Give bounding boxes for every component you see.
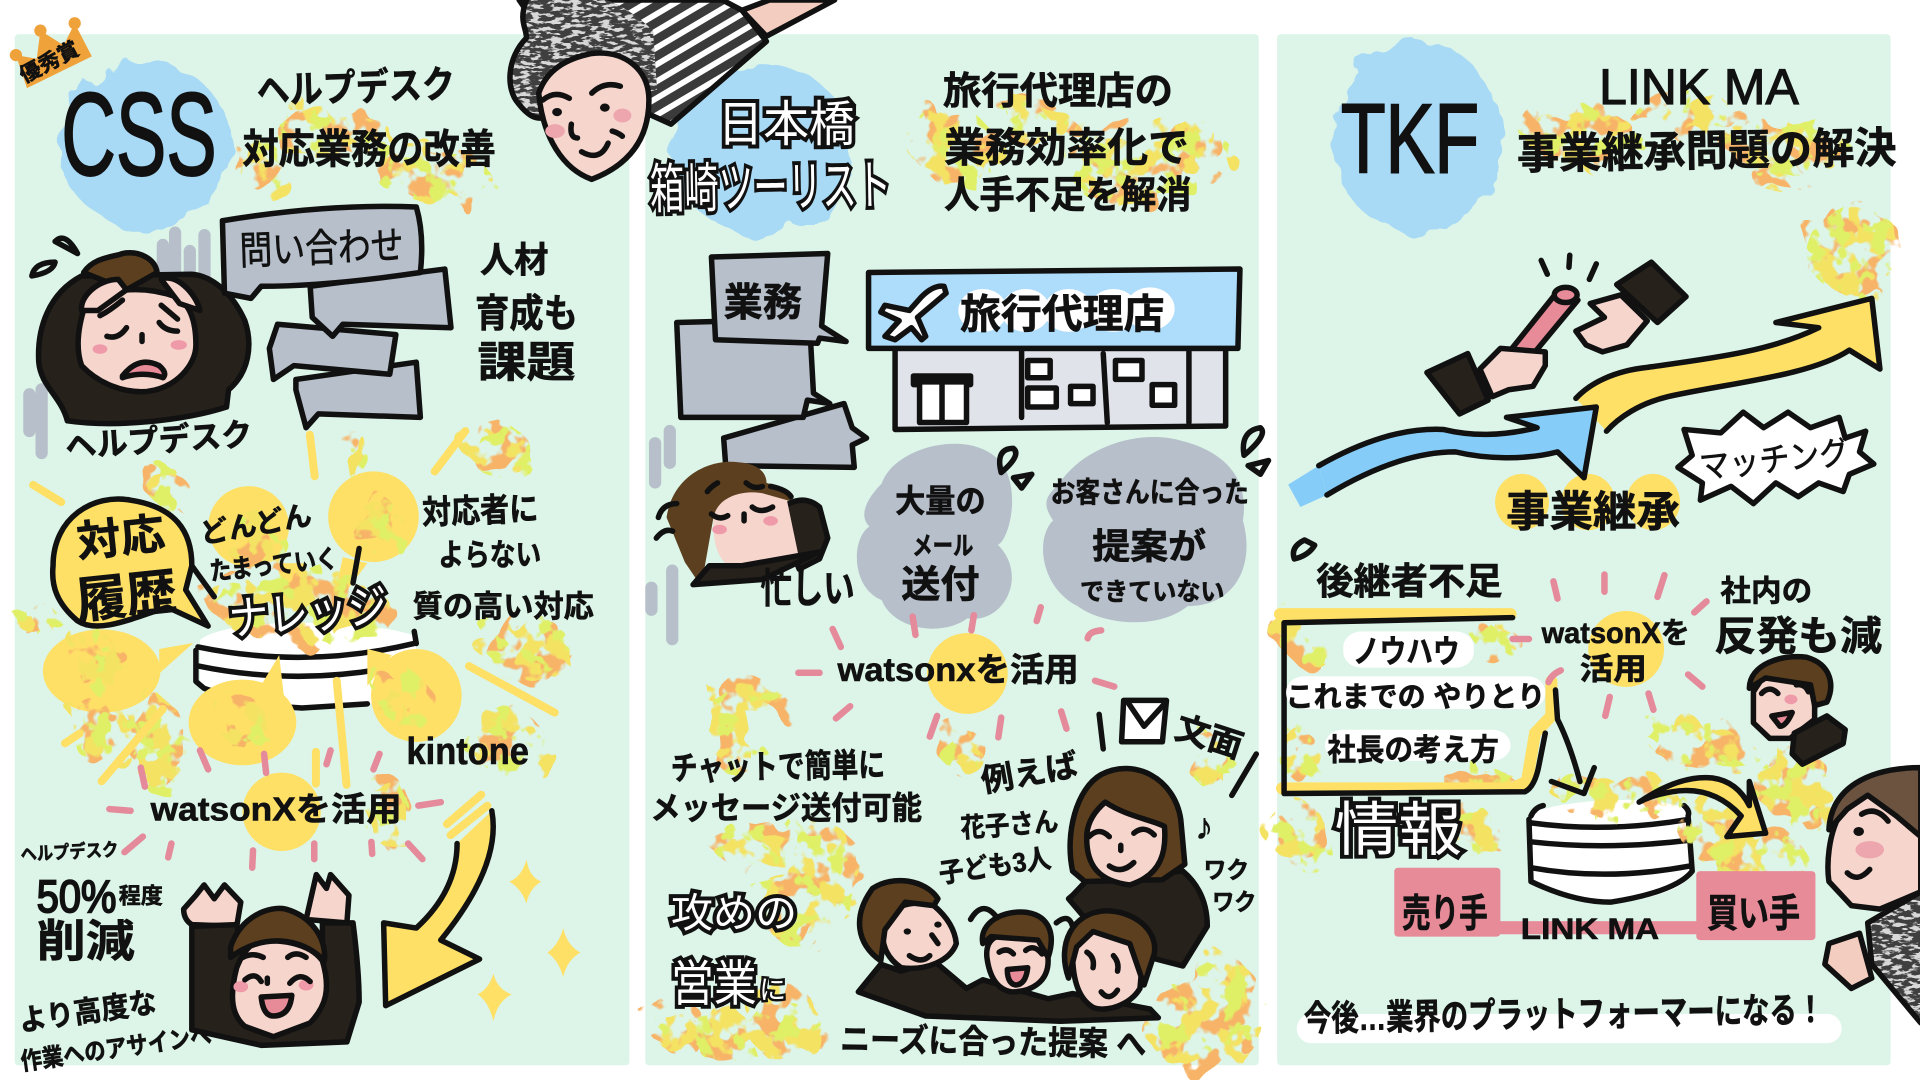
pink rays, panel 2 xyxy=(798,607,1114,737)
gray vibration lines, panel 1 xyxy=(29,233,204,453)
cloud text: bulk mail: 大量の xyxy=(895,483,986,519)
text: training is also an issue: 育成も xyxy=(475,293,578,336)
white highlight under closing line xyxy=(1297,1014,1842,1043)
text: excited: ワク xyxy=(1204,857,1249,883)
text: for example: 例えば xyxy=(978,747,1081,799)
cloud: bulk mail xyxy=(857,444,1012,629)
icon: music note: ♪ xyxy=(1195,806,1213,847)
text: high-quality response: よらない xyxy=(438,539,541,573)
text: chat messaging: チャットで簡単に xyxy=(671,747,885,788)
text: less internal pushback: 反発も減 xyxy=(1714,613,1882,659)
database: LINK MA xyxy=(1529,800,1692,902)
text: use watsonX xyxy=(1541,617,1690,687)
box text: これまでの やりとり xyxy=(1286,682,1545,713)
panel: CSS xyxy=(15,34,629,1065)
title: agency efficiency: 人手不足を解消 xyxy=(944,175,1191,217)
text: excited: ワク xyxy=(1212,889,1256,915)
text: steadily accumulates xyxy=(198,499,339,586)
award badge xyxy=(10,17,92,88)
cloud text: bulk mail: メール xyxy=(912,533,973,561)
text: for example: 花子さん xyxy=(960,807,1059,844)
cloud text: bulk mail xyxy=(895,483,986,607)
panel: Nihonbashi Hakozaki Tourist xyxy=(645,34,1259,1065)
bubble label: 問い合わせ xyxy=(239,225,404,273)
seller, buyer and link labels: LINK MA xyxy=(1521,913,1659,946)
cloud text: proposals: できていない xyxy=(1080,579,1224,606)
gray vibration lines, panel 2 xyxy=(651,431,672,639)
cloud text: proposals: お客さんに合った xyxy=(1051,477,1249,508)
title: LINK MA: LINK MA xyxy=(1599,59,1799,115)
family: mother and three children xyxy=(858,768,1207,1021)
heading: aggressive sales: 営業 xyxy=(671,957,757,1011)
text: excited xyxy=(1204,857,1256,915)
cloud: customer-fit proposals xyxy=(1043,437,1247,622)
text: steadily accumulates: どんどん xyxy=(198,499,314,550)
cloud text: proposals: 提案が xyxy=(1092,526,1206,566)
text: business succession: 事業継承 xyxy=(1506,489,1680,537)
link bar with seller and buyer xyxy=(1394,868,1815,940)
presenter character (top centre) xyxy=(510,0,835,179)
text: helpdesk 50% reduction xyxy=(20,839,163,966)
heading: knowledge: ナレッジ xyxy=(227,580,390,645)
building: travel agency xyxy=(869,269,1240,429)
yellow rays, panel 1 xyxy=(33,431,555,835)
arrow: yellow down-left xyxy=(384,811,493,1006)
text: use watsonX: watsonXを活用 xyxy=(150,791,402,828)
happy person xyxy=(184,875,359,1045)
title: improving support work: 対応業務の改善 xyxy=(242,126,496,172)
title: helpdesk: ヘルプデスク xyxy=(256,63,456,113)
yellow highlight discs xyxy=(43,471,1680,851)
text: successor shortage: 後継者不足 xyxy=(1316,561,1502,602)
text: use watsonx: watsonxを活用 xyxy=(837,652,1079,689)
callout text: 履歴 xyxy=(74,565,179,629)
heading: aggressive sales: に xyxy=(759,975,786,1005)
text: high-quality response: 対応者に xyxy=(421,491,539,532)
text: busy: 忙しい xyxy=(760,565,855,611)
sign text: 旅行代理店 xyxy=(960,291,1164,337)
title: agency efficiency: 業務効率化で xyxy=(944,125,1189,171)
text: helpdesk 50% reduction: ヘルプデスク xyxy=(20,839,119,865)
sparkles xyxy=(478,860,580,1021)
heading: TKF: TKF xyxy=(1341,84,1479,194)
text: chat messaging xyxy=(650,747,922,826)
text: training is also an issue: 課題 xyxy=(478,339,576,387)
heading: aggressive sales xyxy=(671,890,797,1011)
text: steadily accumulates: たまっていく xyxy=(208,545,339,586)
burst text: マッチング xyxy=(1698,434,1851,487)
panel: TKF xyxy=(1277,34,1891,1065)
busy person xyxy=(656,462,828,586)
callout text: 対応 xyxy=(74,510,167,567)
smiling employee xyxy=(1749,657,1845,764)
title: agency efficiency: 旅行代理店の xyxy=(943,71,1173,113)
arrow: yellow rising xyxy=(1576,298,1880,431)
award badge: 優秀賞 xyxy=(16,37,83,88)
blue watercolour blobs behind company names xyxy=(59,42,1502,235)
cloud text: bulk mail: 送付 xyxy=(901,565,980,607)
pink rays around watsonX, panel 1 xyxy=(109,750,441,868)
baton handover hands xyxy=(1427,255,1686,414)
box text xyxy=(1286,633,1545,767)
heading: Hakozaki Tourist: 箱崎ツーリスト xyxy=(649,156,892,220)
heading: CSS: CSS xyxy=(61,69,217,200)
text: assigned to advanced work xyxy=(17,986,213,1076)
burst: matching xyxy=(1678,412,1874,504)
callout: response history xyxy=(53,499,359,626)
text: helpdesk 50% reduction: 程度 xyxy=(119,884,163,909)
text: use watsonX: 活用 xyxy=(1580,653,1647,687)
text: needs-based proposals: ニーズに合った提案 へ xyxy=(840,1021,1147,1064)
cloud text: proposals xyxy=(1051,477,1249,606)
text: helpdesk 50% reduction: 50% xyxy=(37,871,116,922)
worry marks xyxy=(1000,428,1269,795)
title: business succession: 事業継承問題の解決 xyxy=(1516,124,1897,179)
heading: aggressive sales: 攻めの xyxy=(671,890,797,936)
worried helpdesk person xyxy=(32,238,249,424)
text: assigned to advanced work: より高度な xyxy=(17,986,159,1038)
speech bubbles: work xyxy=(677,254,867,467)
database: knowledge store xyxy=(196,623,416,709)
worry mark, panel 3 xyxy=(1293,540,1315,559)
text: helpdesk 50% reduction: 削減 xyxy=(37,917,135,966)
heading: information: 情報 xyxy=(1335,798,1462,863)
text: chat messaging: メッセージ送付可能 xyxy=(650,790,922,826)
text: training is also an issue: 人材 xyxy=(480,240,549,280)
text: less internal pushback: 社内の xyxy=(1720,575,1812,608)
text: assigned to advanced work: 作業へのアサインへ xyxy=(19,1022,213,1076)
text: message wording: 文面 xyxy=(1171,710,1247,766)
text: less internal pushback xyxy=(1714,575,1882,659)
text: training is also an issue xyxy=(475,240,578,387)
text: high-quality response: 質の高い対応 xyxy=(413,590,594,624)
seller, buyer and link labels: 売り手 xyxy=(1402,893,1488,936)
callout text xyxy=(74,510,179,629)
box text: 社長の考え方 xyxy=(1327,733,1499,767)
box text: ノウハウ xyxy=(1353,633,1460,669)
text: for example xyxy=(937,747,1081,889)
speech bubbles: inquiries xyxy=(222,206,451,428)
information box xyxy=(1280,574,1766,837)
icon: envelope xyxy=(1122,700,1166,742)
seller, buyer and link labels: 買い手 xyxy=(1707,893,1800,936)
label: helpdesk: ヘルプデスク xyxy=(64,416,254,465)
bubble label: 業務 xyxy=(724,282,802,325)
text: for example: 子ども3人 xyxy=(937,843,1053,889)
label: kintone: kintone xyxy=(407,731,529,773)
seller, buyer and link labels xyxy=(1402,893,1800,946)
title: agency efficiency xyxy=(943,71,1191,217)
arrow: blue rising xyxy=(1288,407,1596,507)
text: use watsonX: watsonXを xyxy=(1541,617,1690,650)
text: high-quality response xyxy=(413,491,594,624)
heading: Nihonbashi: 日本橋 xyxy=(718,98,855,152)
presenter character (bottom right) xyxy=(1825,768,1920,1023)
